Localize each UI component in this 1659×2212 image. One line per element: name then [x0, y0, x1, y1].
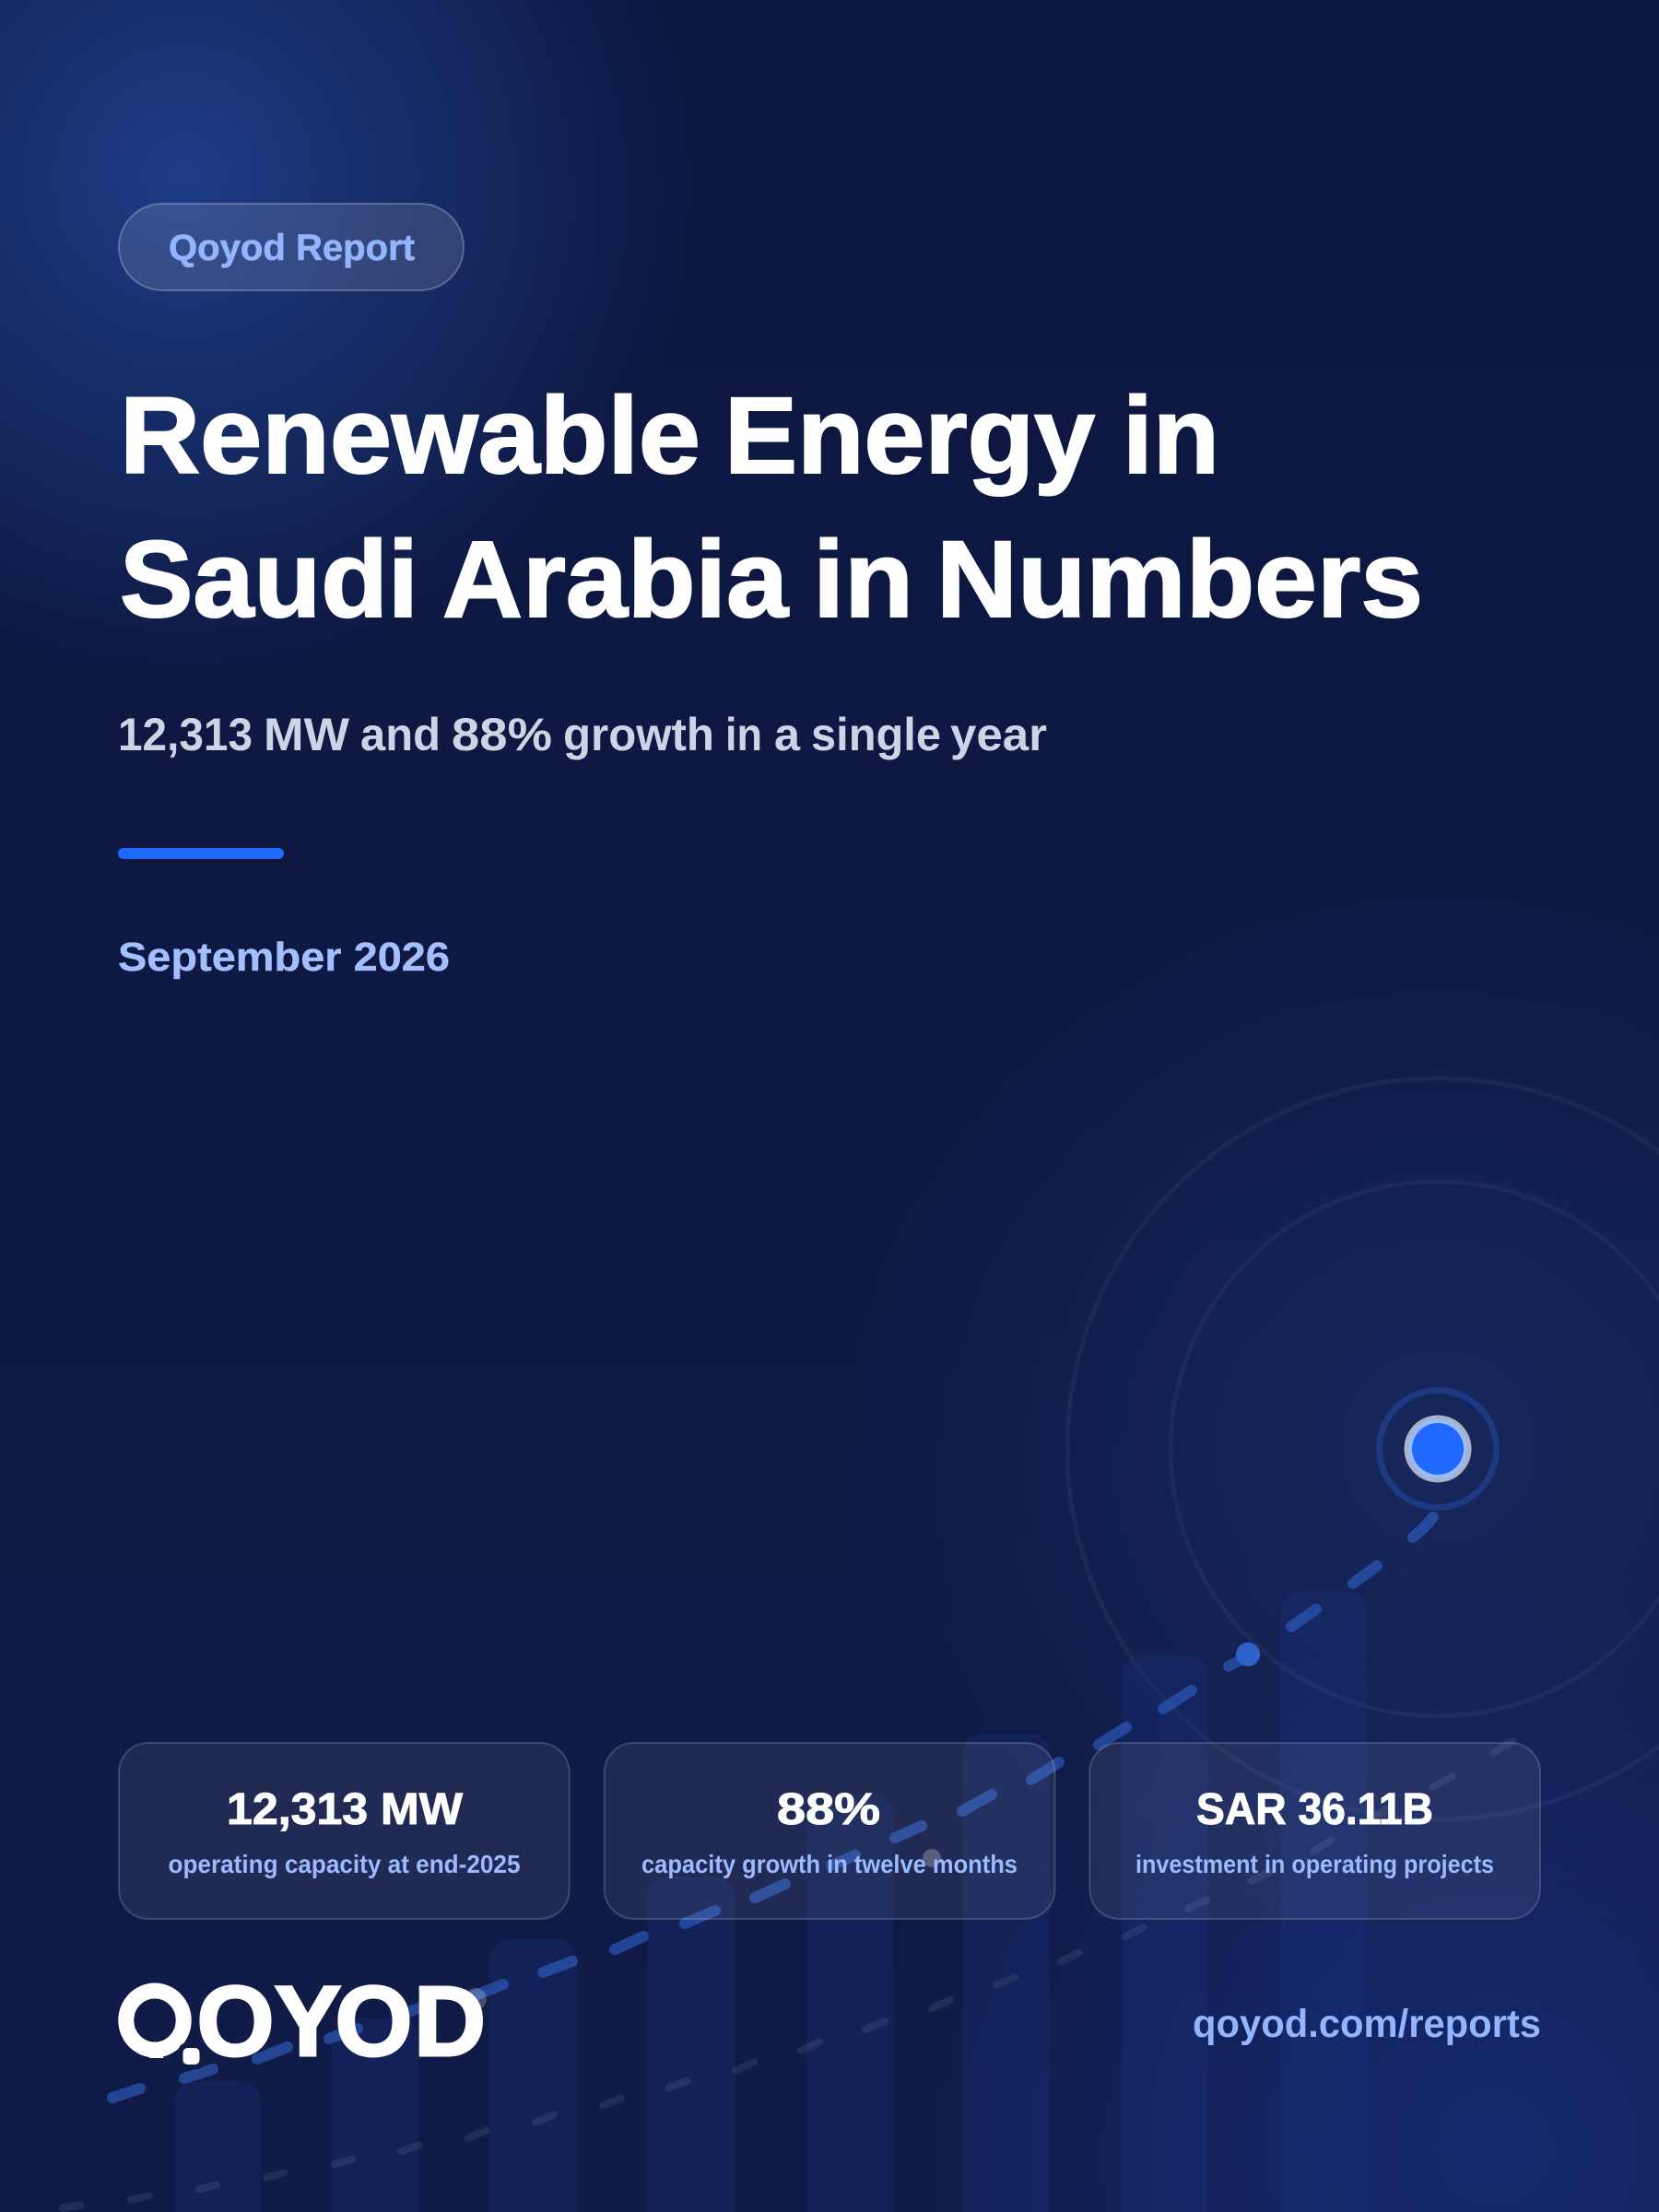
subtitle: 88% — [452, 709, 552, 760]
report badge — [119, 204, 464, 290]
footer url: qoyod.com/reports — [1193, 2002, 1541, 2046]
title: Numbers — [936, 519, 1423, 641]
title: in — [1123, 375, 1219, 497]
subtitle: in — [725, 709, 762, 760]
logo: QOYOD wordmark: Q — [118, 1972, 190, 2076]
report badge: Qoyod Report — [169, 228, 415, 268]
title — [120, 375, 1423, 641]
secondary dashed trend line — [63, 1741, 1512, 2208]
subtitle: a — [774, 709, 801, 760]
highlighted end point marker — [1379, 1390, 1497, 1508]
trend line marker dots — [465, 1642, 1260, 2010]
title: Renewable — [120, 375, 700, 497]
title: Saudi — [120, 519, 418, 641]
subtitle: single — [811, 709, 941, 760]
logo: QOYOD wordmark: OYOD — [197, 1965, 486, 2077]
primary dashed trend line — [112, 1517, 1433, 2098]
stat card: operating capacity: operating capacity at end-2025 — [168, 1850, 520, 1878]
stat card: investment — [1089, 1743, 1540, 1919]
stat card: operating capacity: 12,313 MW — [227, 1785, 464, 1834]
stat card: capacity growth — [605, 1743, 1054, 1919]
stat card: investment: investment in operating projects — [1135, 1850, 1494, 1878]
logo: QOYOD wordmark — [118, 1983, 483, 2069]
title: Energy — [724, 375, 1095, 497]
stat card: operating capacity — [119, 1743, 570, 1919]
stat card: capacity growth: 88% — [777, 1785, 880, 1834]
subtitle: 12,313 — [118, 709, 253, 760]
background bar chart — [174, 1592, 1367, 2212]
title: Arabia — [442, 519, 789, 641]
subtitle: MW — [264, 709, 350, 760]
date: September 2026 — [118, 935, 450, 980]
subtitle: year — [950, 709, 1047, 760]
concentric rings — [1067, 1078, 1659, 1819]
accent bar — [118, 848, 284, 859]
subtitle — [118, 709, 1047, 760]
subtitle: and — [360, 709, 441, 760]
stat card: capacity growth: capacity growth in twelve months — [641, 1850, 1018, 1878]
subtitle: growth — [563, 709, 714, 760]
title: in — [813, 519, 913, 641]
stat card: investment: SAR 36.11B — [1196, 1785, 1433, 1834]
